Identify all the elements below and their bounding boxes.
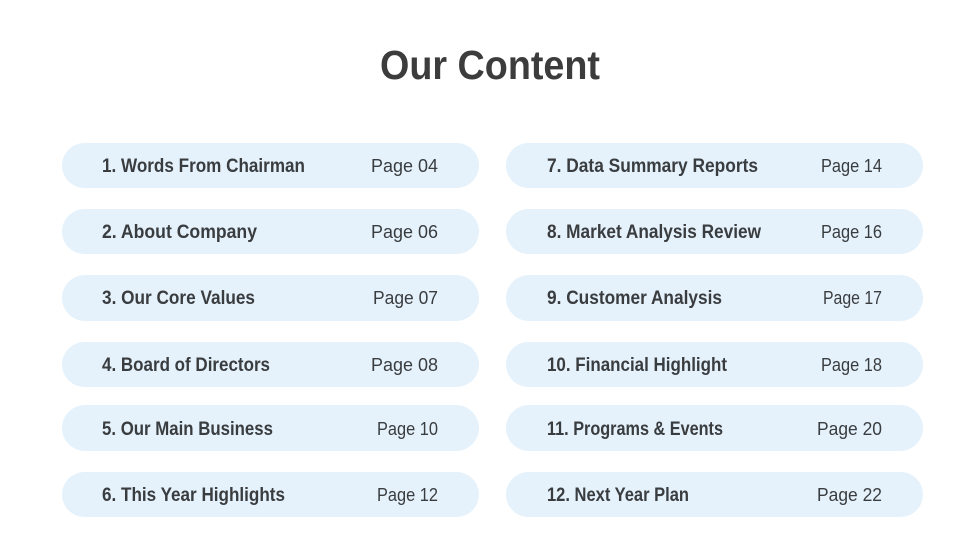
item 3: Page 07 xyxy=(373,287,438,308)
panel: contents right column xyxy=(506,143,923,517)
item 2 xyxy=(62,209,479,254)
item 6: 6. This Year Highlights xyxy=(102,485,285,506)
item 9: Page 17 xyxy=(823,287,882,308)
item 1: 1. Words From Chairman xyxy=(102,156,305,177)
item 2: Page 06 xyxy=(371,221,438,242)
item 1 xyxy=(62,143,479,188)
item 12: Page 22 xyxy=(817,484,882,505)
item 10: Page 18 xyxy=(821,354,882,375)
item 9 xyxy=(506,275,923,321)
item 5 xyxy=(62,405,479,451)
item 6: Page 12 xyxy=(377,484,438,505)
item 3: 3. Our Core Values xyxy=(102,288,255,309)
item 11: 11. Programs & Events xyxy=(547,419,723,440)
item 2: 2. About Company xyxy=(102,222,257,243)
item 4: 4. Board of Directors xyxy=(102,355,270,376)
item 8: 8. Market Analysis Review xyxy=(547,222,761,243)
item 4 xyxy=(62,342,479,387)
item 7 xyxy=(506,143,923,188)
item 4: Page 08 xyxy=(371,354,438,375)
item 10 xyxy=(506,342,923,387)
title: Our Content xyxy=(380,42,600,88)
item 7: 7. Data Summary Reports xyxy=(547,156,758,177)
item 3 xyxy=(62,275,479,321)
item 5: 5. Our Main Business xyxy=(102,419,273,440)
item 11: Page 20 xyxy=(817,418,882,439)
item 5: Page 10 xyxy=(377,418,438,439)
item 8: Page 16 xyxy=(821,221,882,242)
item 10: 10. Financial Highlight xyxy=(547,355,728,376)
item 12: 12. Next Year Plan xyxy=(547,485,689,506)
item 8 xyxy=(506,209,923,254)
item 9: 9. Customer Analysis xyxy=(547,288,722,309)
item 6 xyxy=(62,472,479,517)
item 7: Page 14 xyxy=(821,155,882,176)
item 12 xyxy=(506,472,923,517)
item 1: Page 04 xyxy=(371,155,438,176)
panel: contents left column xyxy=(62,143,479,517)
item 11 xyxy=(506,405,923,451)
